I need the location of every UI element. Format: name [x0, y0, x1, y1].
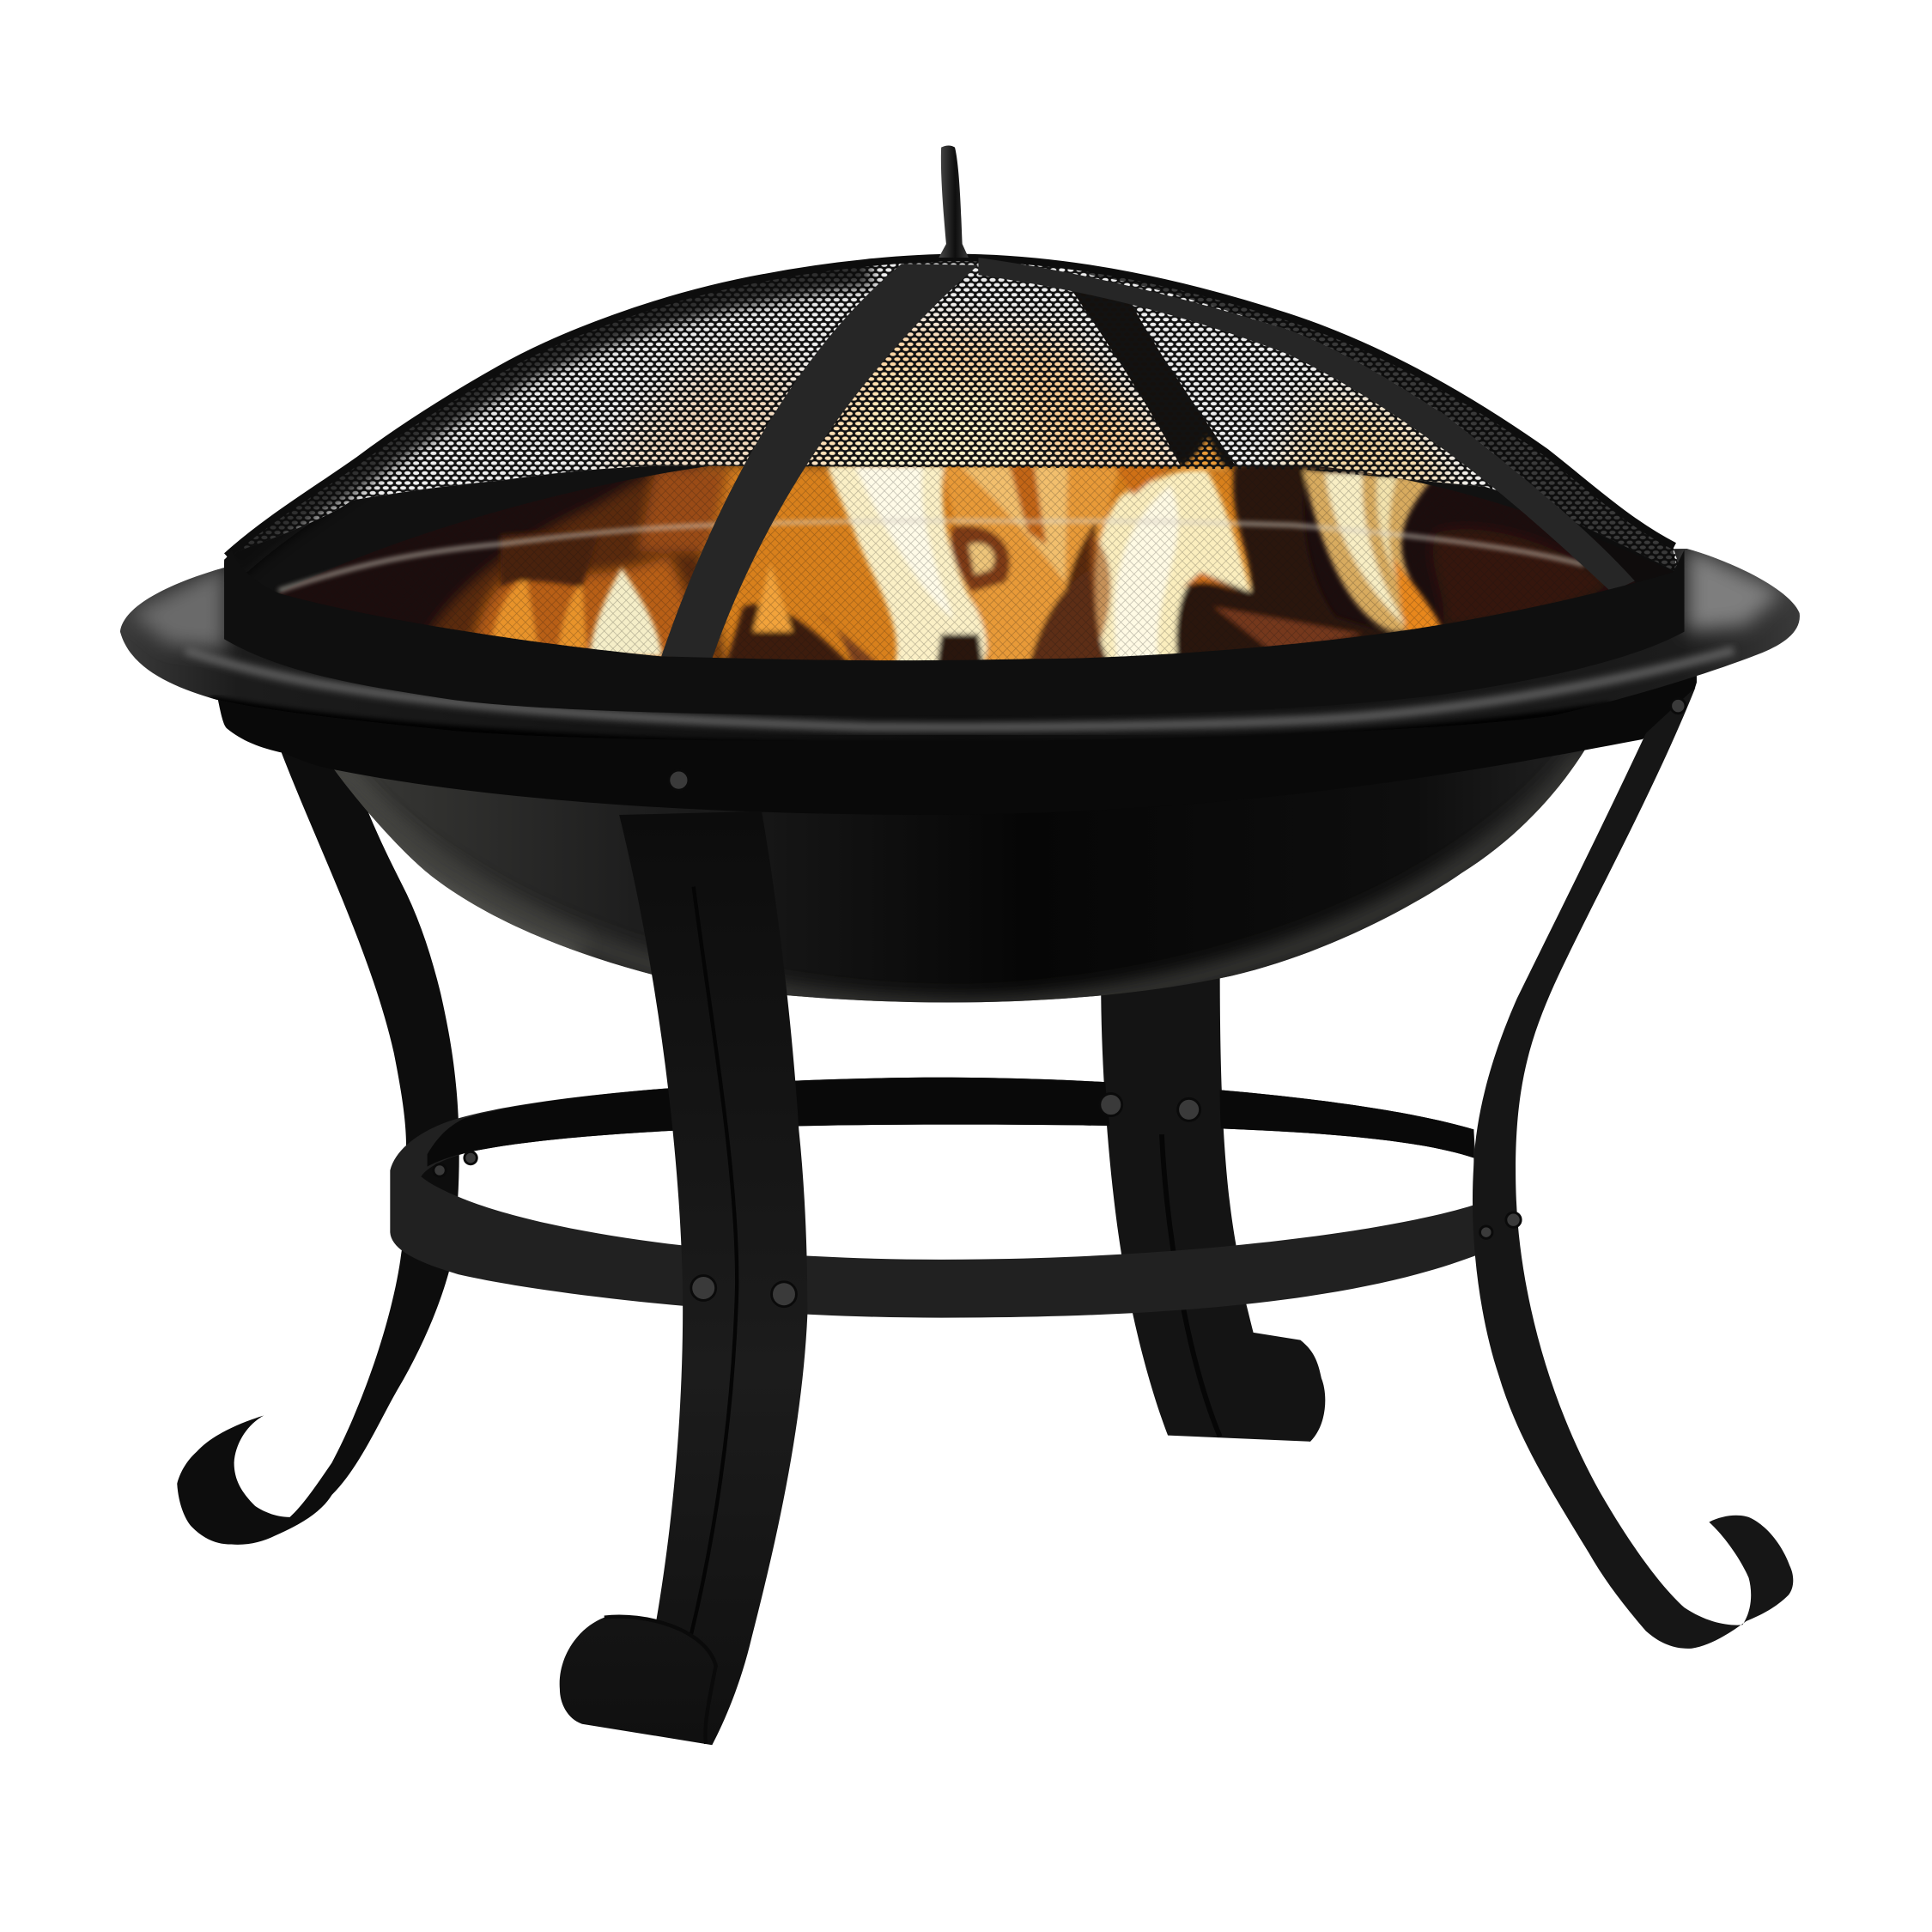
handle [939, 145, 969, 258]
fire base glow [279, 465, 1635, 661]
dome straps [661, 258, 1635, 659]
dark mesh beyond the right strap [1090, 273, 1676, 582]
spark screen dome [216, 247, 1697, 681]
illustration: fire pit with spark screen [120, 146, 1800, 1745]
bowl [334, 750, 1585, 1003]
warm glow behind mesh [594, 328, 1461, 495]
collar under rim [216, 644, 1697, 815]
mesh screen upper area [216, 247, 1697, 582]
back rim reflection [279, 520, 1584, 591]
bolts [434, 698, 1686, 1307]
left leg with scroll foot [177, 751, 459, 1545]
back strap behind mesh [1072, 291, 1236, 469]
fine mesh over fire [433, 465, 1599, 661]
fire [279, 465, 1635, 661]
flame tip above the rim line [1170, 436, 1229, 471]
back leg overlap on ring [1105, 1072, 1221, 1134]
rim of the bowl [120, 545, 1800, 747]
dark mesh edge shading [224, 261, 869, 560]
right leg with scroll foot [1473, 687, 1793, 1649]
dome outline [227, 258, 1674, 556]
inner bowl seen through mesh [224, 465, 1674, 593]
flames [489, 465, 1443, 675]
screen band [224, 550, 1685, 716]
back leg [1101, 972, 1325, 1442]
front leg with scroll foot [560, 811, 807, 1745]
lower support ring [390, 1078, 1481, 1318]
mesh backdrop [309, 261, 1678, 570]
